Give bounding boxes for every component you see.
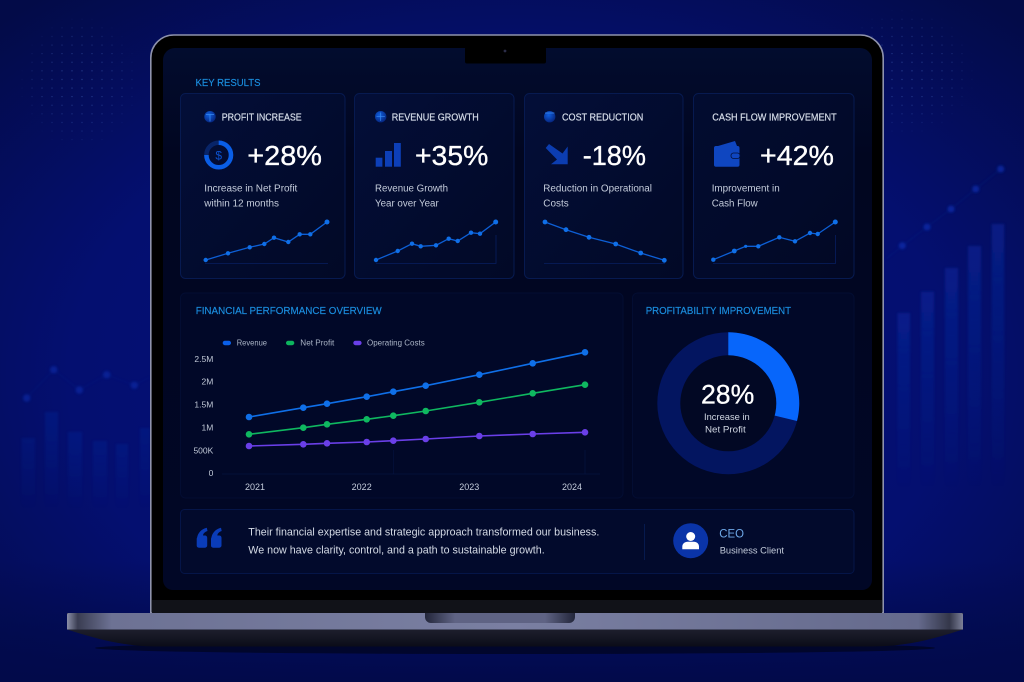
icon: globe badge: [204, 111, 216, 122]
card: profit increase: [180, 94, 345, 278]
laptop base: [67, 613, 963, 646]
card: revenue growth: [354, 94, 514, 278]
donut value: 28%: [701, 379, 754, 409]
description: [375, 184, 448, 210]
background bar chart: right: [886, 166, 1004, 488]
donut label: [704, 412, 750, 436]
card title: REVENUE GROWTH: [392, 113, 479, 124]
description: [203, 184, 298, 210]
y axis labels: 2.5M: [194, 354, 213, 364]
icon: avatar: [673, 523, 708, 558]
quote text: [248, 527, 599, 556]
description: Reduction in Operational: [543, 184, 652, 195]
donut chart: [657, 332, 799, 474]
legend: Net Profit: [300, 338, 335, 348]
description: Year over Year: [375, 199, 439, 210]
donut label: Net Profit: [705, 425, 746, 436]
card title: PROFIT INCREASE: [222, 113, 302, 124]
card title: CASH FLOW IMPROVEMENT: [712, 113, 837, 124]
y axis labels: 1.5M: [194, 400, 213, 410]
x axis labels: 2022: [352, 482, 372, 492]
icon: dollar ring: $: [215, 148, 222, 162]
icon: down arrow: [546, 144, 568, 164]
description: Revenue Growth: [375, 184, 448, 195]
laptop lid: [151, 35, 883, 613]
line: operating costs: [246, 429, 588, 449]
icon: quote marks: [197, 528, 222, 548]
line: net profit: [246, 381, 588, 438]
line: revenue: [246, 349, 588, 420]
x axis labels: 2023: [459, 482, 479, 492]
description: [543, 184, 652, 210]
y axis labels: 500K: [193, 445, 214, 455]
sparkline: [204, 220, 330, 264]
legend: Operating Costs: [367, 338, 425, 348]
y axis labels: [193, 354, 214, 478]
sparkline: [374, 220, 498, 264]
icon: bars: [376, 143, 401, 167]
dot pattern: top left: [32, 19, 132, 140]
legend: Revenue: [237, 338, 268, 348]
heading: FINANCIAL PERFORMANCE OVERVIEW: [196, 306, 382, 317]
x axis labels: 2021: [245, 482, 265, 492]
y axis labels: 0: [209, 468, 214, 478]
hinge notch: [425, 613, 575, 623]
icon: globe badge: [544, 111, 555, 122]
client name: Business Client: [720, 545, 784, 556]
description: Cash Flow: [712, 199, 758, 210]
section heading: key results: KEY RESULTS: [196, 78, 261, 89]
dot pattern: top right: [862, 18, 962, 132]
legend: [223, 338, 425, 348]
client role: CEO: [719, 527, 744, 541]
panel: testimonial: [180, 510, 854, 574]
icon: wallet: [714, 141, 740, 167]
metric value: +35%: [415, 140, 488, 171]
icon: globe badge: [375, 111, 386, 122]
metric value: +42%: [760, 140, 834, 171]
donut label: Increase in: [704, 412, 750, 423]
metric value: -18%: [583, 140, 646, 171]
metric value: +28%: [247, 140, 322, 171]
description: Increase in Net Profit: [204, 184, 298, 195]
x axis labels: [245, 482, 582, 492]
description: Improvement in: [712, 184, 780, 195]
card title: COST REDUCTION: [562, 113, 643, 124]
card: cash flow improvement: [694, 94, 854, 278]
quote text: We now have clarity, control, and a path to sustainable growth.: [248, 544, 545, 556]
background bar chart: left: [22, 366, 150, 508]
heading: PROFITABILITY IMPROVEMENT: [646, 306, 791, 317]
y axis labels: 1M: [201, 423, 213, 433]
laptop screen: [163, 47, 872, 590]
laptop shadow: [95, 642, 935, 654]
panel: profitability improvement: [632, 293, 854, 498]
card: cost reduction: [524, 94, 683, 278]
description: Costs: [543, 199, 569, 210]
icon: dollar ring: [206, 143, 231, 167]
y axis labels: 2M: [201, 377, 213, 387]
quote text: Their financial expertise and strategic approach transformed our business.: [248, 527, 599, 539]
sparkline: [711, 220, 838, 264]
camera notch: [465, 47, 546, 64]
description: within 12 months: [203, 199, 279, 210]
description: [712, 184, 780, 210]
panel: financial performance overview: [180, 293, 623, 498]
sparkline: [543, 220, 667, 264]
x axis labels: 2024: [562, 482, 582, 492]
